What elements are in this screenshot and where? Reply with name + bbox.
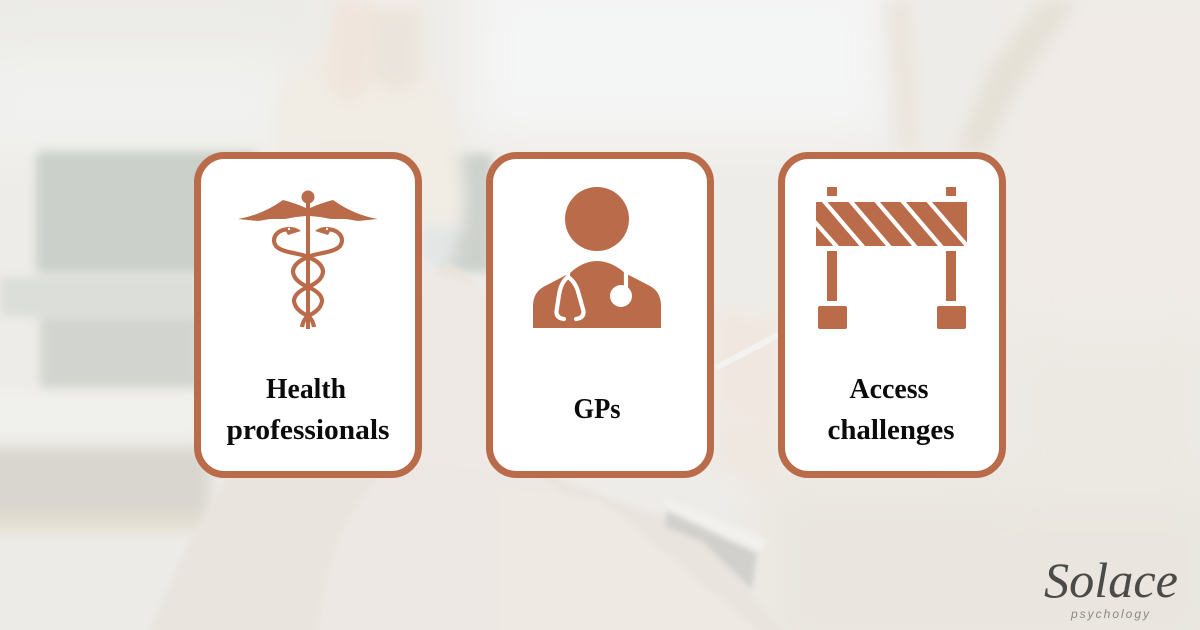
card frame (782, 156, 1002, 474)
label: health professionals: Health (266, 374, 346, 405)
icon: doctor with stethoscope (533, 187, 661, 328)
label: access challenges: Access (850, 374, 929, 405)
notebook shadow (666, 510, 757, 590)
pen (716, 335, 778, 368)
panel: GPs (490, 156, 710, 474)
label: access challenges: challenges (828, 415, 955, 446)
panel: access challenges (782, 156, 1002, 474)
icon: road barrier (814, 187, 969, 329)
icon: caduceus (238, 190, 378, 329)
logo: Solace psychology: Solace (1044, 552, 1178, 608)
logo: Solace psychology: psychology (1070, 607, 1150, 621)
label: health professionals: professionals (226, 415, 390, 446)
card frame (490, 156, 710, 474)
panel: health professionals (198, 156, 418, 474)
card frame (198, 156, 418, 474)
label: GPs: GPs (574, 394, 621, 425)
